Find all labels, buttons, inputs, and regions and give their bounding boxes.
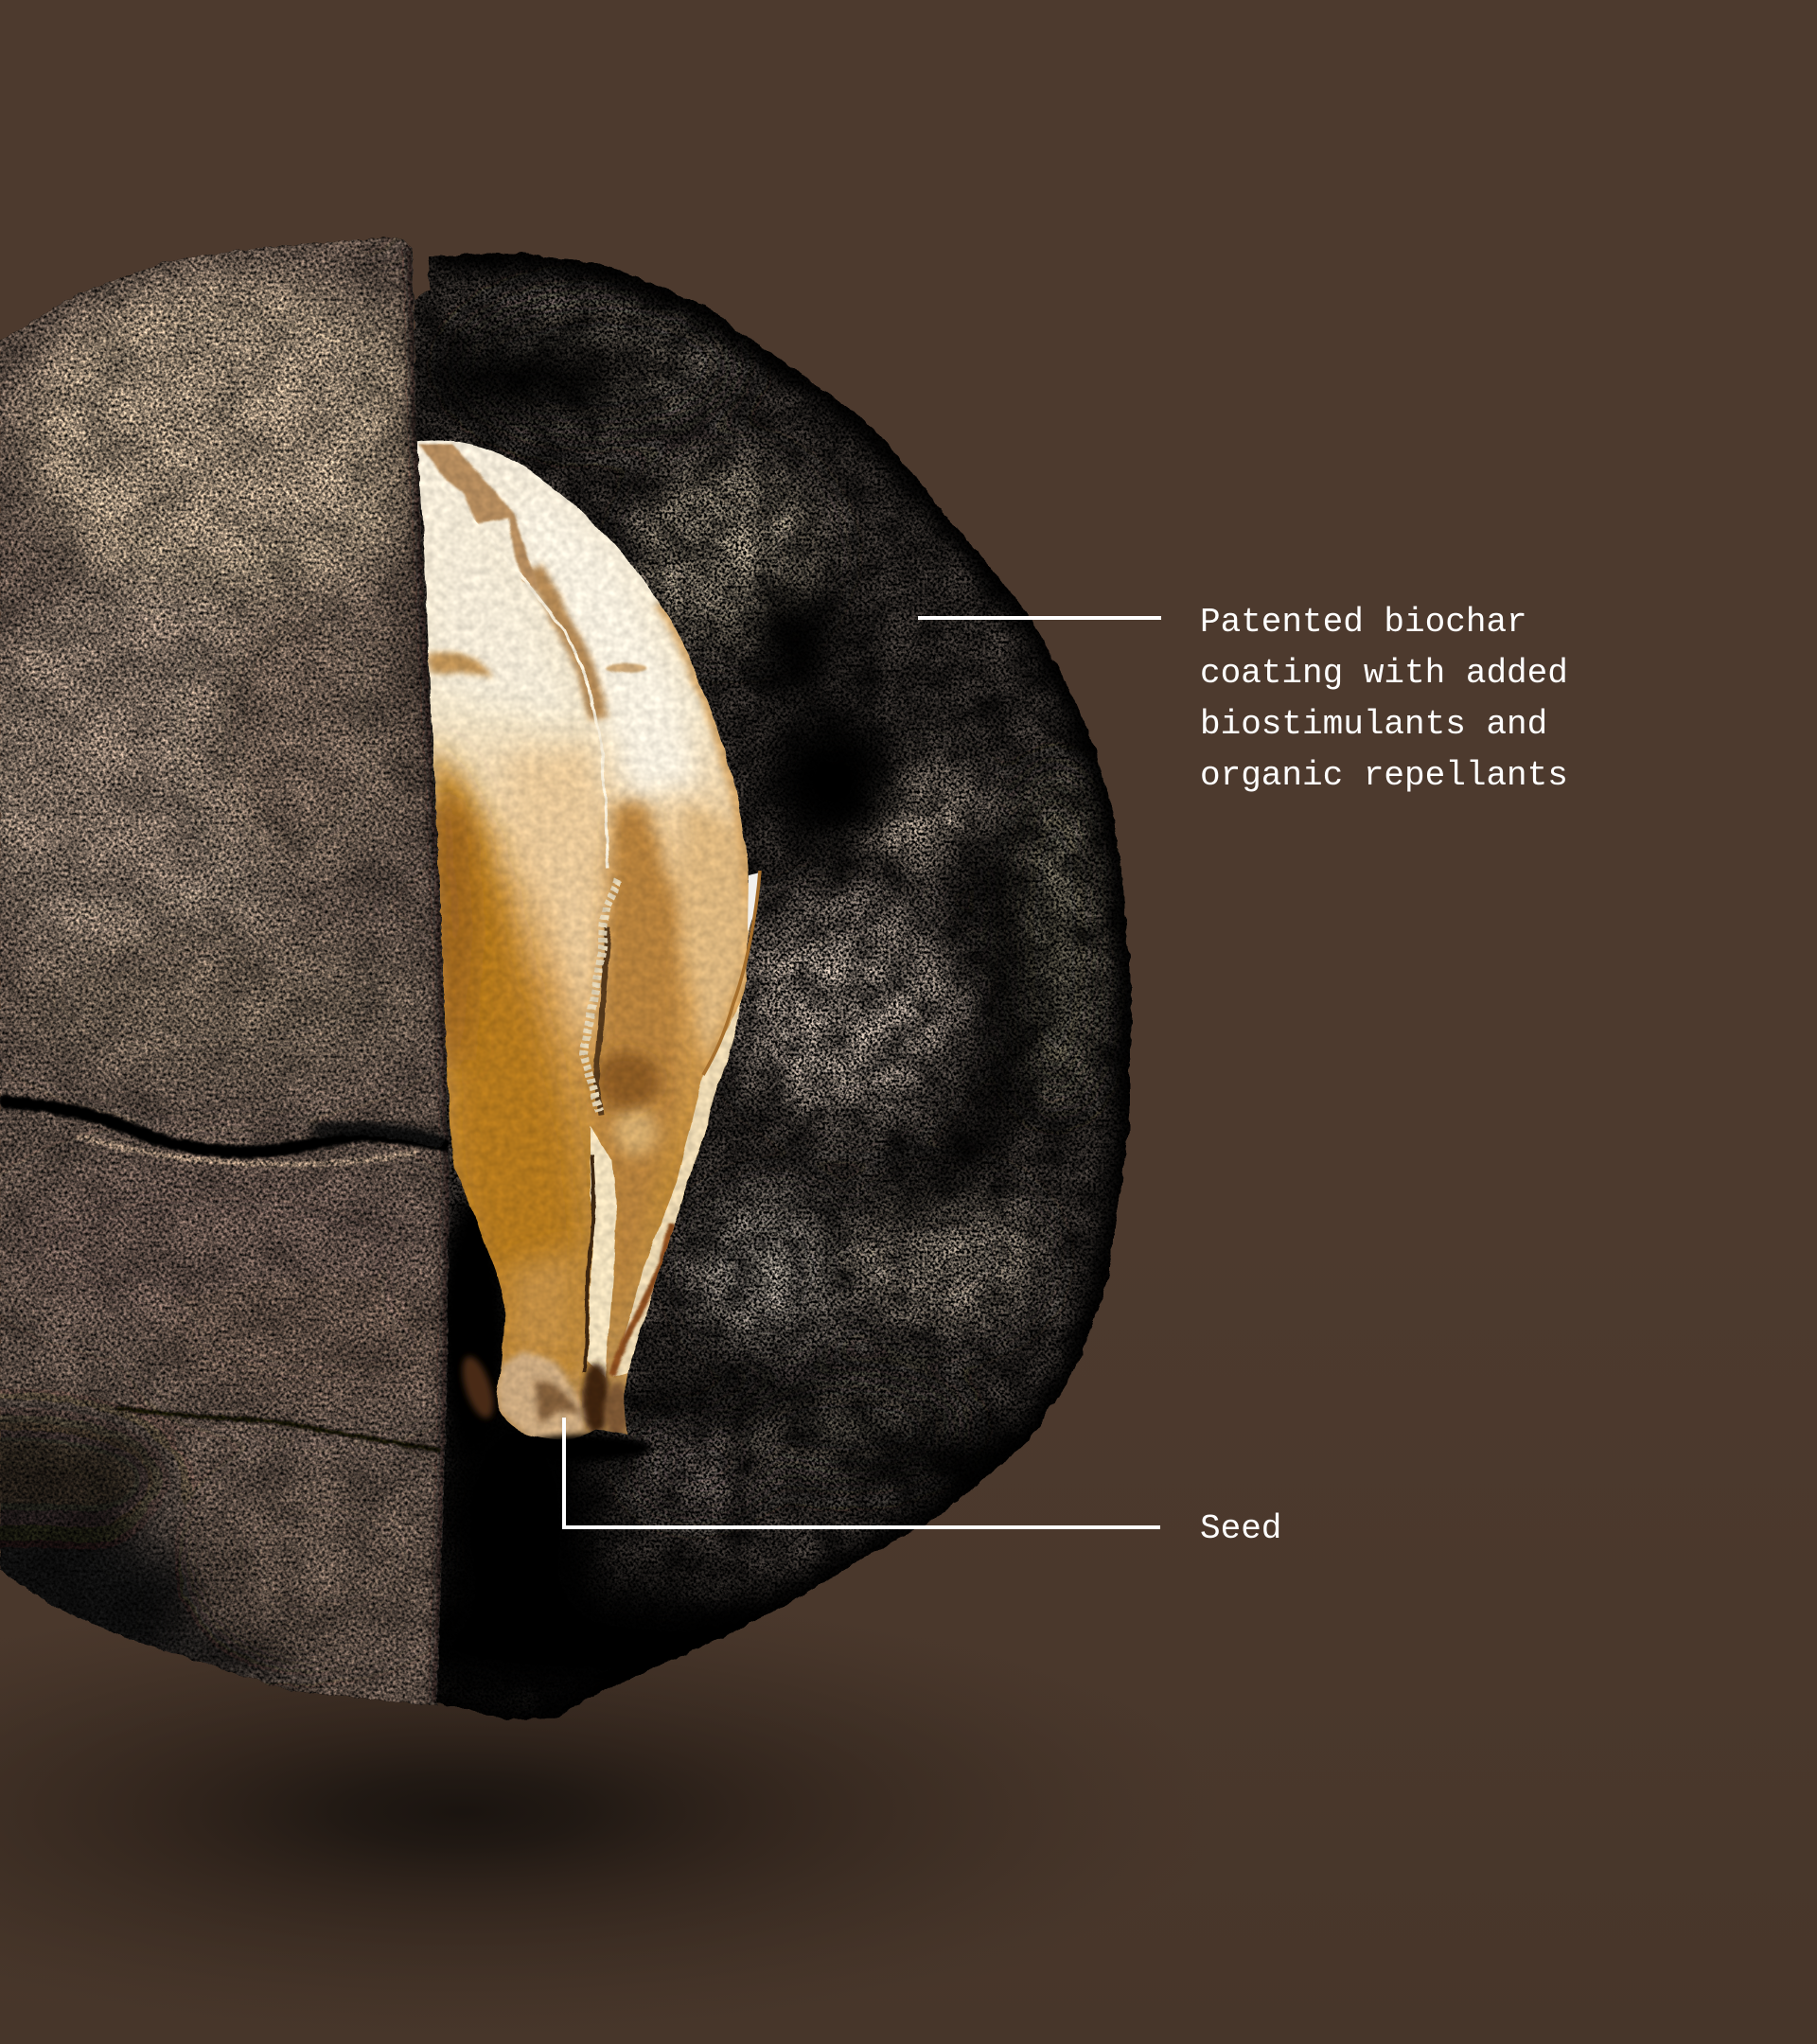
seed tuft [498, 1350, 590, 1440]
brown fragment beside seed base [456, 1353, 500, 1421]
cream highlight on right lobe [502, 492, 700, 800]
cream strip in lower crease [587, 1126, 617, 1379]
left lobe cream top [421, 454, 577, 719]
label: biochar coating [1200, 603, 1568, 795]
left lobe deep edge [428, 795, 473, 1060]
right lobe amber core [598, 790, 679, 1339]
label: biochar coating: organic repellants [1200, 756, 1568, 795]
neck amber [506, 1249, 579, 1363]
label: biochar coating: biostimulants and [1200, 705, 1547, 744]
seed body group [407, 435, 767, 1448]
husk strip [613, 994, 746, 1377]
main crack shadow [313, 1128, 443, 1142]
right edge shadow [412, 248, 450, 1706]
dark crease at tip [583, 1363, 609, 1435]
panel: dark biochar coating, right half [365, 235, 1147, 1734]
cast shadow below seed [0, 1585, 1221, 2039]
small tan dash on right lobe [606, 663, 647, 673]
crease upper dark gap [596, 926, 609, 1115]
crease fibres [584, 880, 618, 1111]
callout: biochar coating [918, 603, 1568, 795]
left lobe peach band [502, 748, 606, 1060]
label: seed: Seed [1200, 1509, 1281, 1548]
dark cavity behind seed base [437, 1202, 509, 1457]
leader line: seed [564, 1418, 1160, 1527]
main crack [0, 1101, 450, 1153]
crack highlight [79, 1137, 417, 1165]
right edge amber rim [660, 603, 750, 899]
husk orange line [703, 871, 760, 1075]
right lobe light patch [613, 1106, 659, 1155]
seed [407, 435, 767, 1461]
fade below seed tip [520, 1435, 653, 1461]
right lobe outer band [686, 804, 748, 1069]
tuft shadow [535, 1381, 582, 1424]
panel: cut biochar face, left half [0, 221, 469, 1720]
leader line: biochar coating [918, 616, 1161, 620]
horizontal tan mark on left lobe [428, 653, 492, 677]
husk brown stripe lower [612, 1224, 672, 1376]
seed body [407, 435, 767, 1448]
brown top marks [419, 445, 539, 591]
seam line between lobes [426, 467, 609, 868]
white wedge on husk [748, 872, 760, 932]
callout: seed [564, 1418, 1281, 1548]
seed pellet illustration [0, 221, 1147, 1734]
label: biochar coating: Patented biochar [1200, 603, 1527, 642]
left lobe amber shading [431, 748, 579, 1372]
brown seam band at top [535, 568, 598, 719]
right lobe dark spot [595, 1052, 660, 1109]
lower crack [117, 1407, 441, 1451]
label: biochar coating: coating with added [1200, 654, 1568, 693]
crease dark line [584, 1154, 594, 1372]
right nub [605, 1382, 629, 1438]
